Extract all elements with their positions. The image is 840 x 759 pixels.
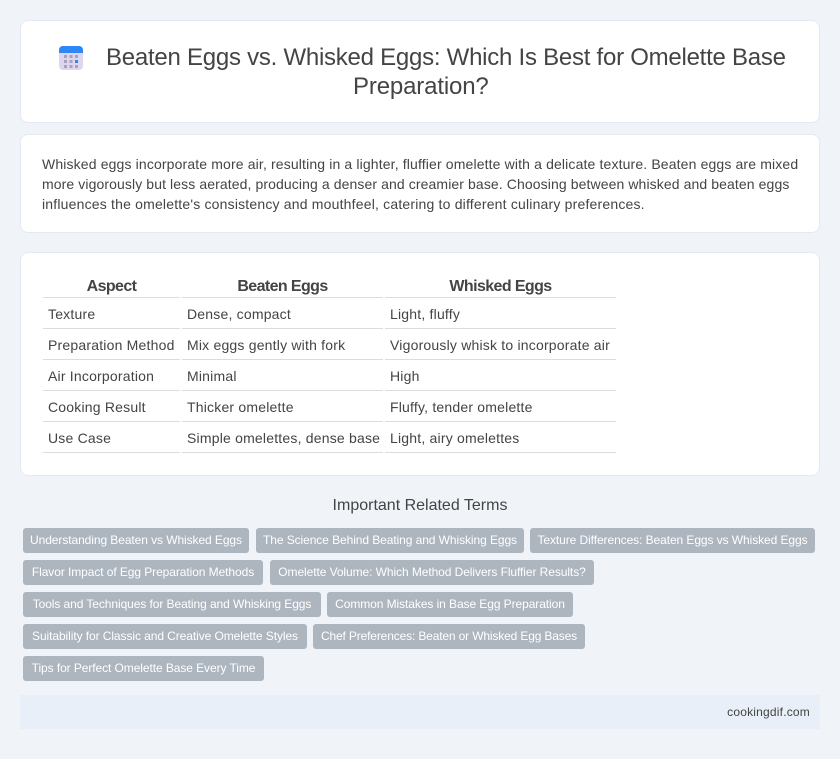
panel: introduction bbox=[20, 134, 820, 233]
row: texture: Dense, compact bbox=[187, 306, 291, 322]
row: use case: Use Case bbox=[48, 430, 111, 446]
tag bbox=[327, 592, 573, 617]
table bbox=[43, 278, 616, 453]
tag: Texture Differences: Beaten Eggs vs Whisked Eggs bbox=[537, 533, 808, 547]
row: air incorporation: High bbox=[390, 368, 420, 384]
tag: Tips for Perfect Omelette Base Every Time bbox=[32, 661, 255, 675]
icon: calendar bbox=[59, 46, 83, 70]
title bbox=[106, 44, 786, 100]
tag: The Science Behind Beating and Whisking Eggs bbox=[263, 533, 517, 547]
row: cooking result bbox=[48, 399, 533, 415]
table header: whisked eggs: Whisked Eggs bbox=[449, 278, 552, 295]
table header: aspect: Aspect bbox=[87, 278, 136, 295]
tag bbox=[23, 624, 307, 649]
row: cooking result: Thicker omelette bbox=[187, 399, 294, 415]
tag: Suitability for Classic and Creative Omelette Styles bbox=[32, 629, 298, 643]
row: preparation method: Mix eggs gently with fork bbox=[187, 337, 345, 353]
row: preparation method: Preparation Method bbox=[48, 337, 175, 353]
row: texture: Texture bbox=[48, 306, 95, 322]
tag bbox=[23, 560, 263, 585]
row: use case: Light, airy omelettes bbox=[390, 430, 519, 446]
row: air incorporation: Minimal bbox=[187, 368, 237, 384]
row: preparation method: Vigorously whisk to incorporate air bbox=[390, 337, 610, 353]
intro text bbox=[42, 156, 798, 212]
tag: Chef Preferences: Beaten or Whisked Egg Bases bbox=[321, 629, 577, 643]
tag bbox=[313, 624, 585, 649]
title: Preparation? bbox=[353, 73, 489, 100]
row: preparation method bbox=[48, 337, 610, 353]
panel: title header bbox=[20, 20, 820, 123]
row: air incorporation bbox=[48, 368, 420, 384]
tag bbox=[23, 656, 264, 681]
title: Beaten Eggs vs. Whisked Eggs: Which Is Best for Omelette Base bbox=[106, 44, 786, 71]
row: use case: Simple omelettes, dense base bbox=[187, 430, 380, 446]
tag list: related terms bbox=[23, 528, 815, 681]
tag bbox=[23, 592, 321, 617]
tag bbox=[23, 528, 249, 553]
intro text: Whisked eggs incorporate more air, resulting in a lighter, fluffier omelette with a delicate texture. Beaten eggs are mixed bbox=[42, 156, 798, 172]
tag: Omelette Volume: Which Method Delivers Fluffier Results? bbox=[278, 565, 586, 579]
heading: important related terms: Important Related Terms bbox=[333, 497, 507, 514]
panel: comparison table bbox=[20, 252, 820, 476]
footer bar bbox=[20, 695, 820, 729]
tag: Understanding Beaten vs Whisked Eggs bbox=[30, 533, 242, 547]
tag bbox=[530, 528, 815, 553]
row: use case bbox=[48, 430, 519, 446]
table header: beaten eggs: Beaten Eggs bbox=[237, 278, 328, 295]
tag: Common Mistakes in Base Egg Preparation bbox=[335, 597, 565, 611]
row: cooking result: Fluffy, tender omelette bbox=[390, 399, 533, 415]
row: air incorporation: Air Incorporation bbox=[48, 368, 154, 384]
intro text: influences the omelette's consistency and mouthfeel, catering to different culinary preferences. bbox=[42, 196, 645, 212]
row: cooking result: Cooking Result bbox=[48, 399, 146, 415]
row: texture: Light, fluffy bbox=[390, 306, 460, 322]
tag: Flavor Impact of Egg Preparation Methods bbox=[32, 565, 254, 579]
tag bbox=[270, 560, 594, 585]
tag: Tools and Techniques for Beating and Whisking Eggs bbox=[33, 597, 311, 611]
intro text: more vigorously but less aerated, producing a denser and creamier base. Choosing between whisked and beaten eggs bbox=[42, 176, 789, 192]
tag bbox=[256, 528, 524, 553]
row: texture bbox=[48, 306, 460, 322]
footer source text: cookingdif.com bbox=[727, 705, 810, 719]
